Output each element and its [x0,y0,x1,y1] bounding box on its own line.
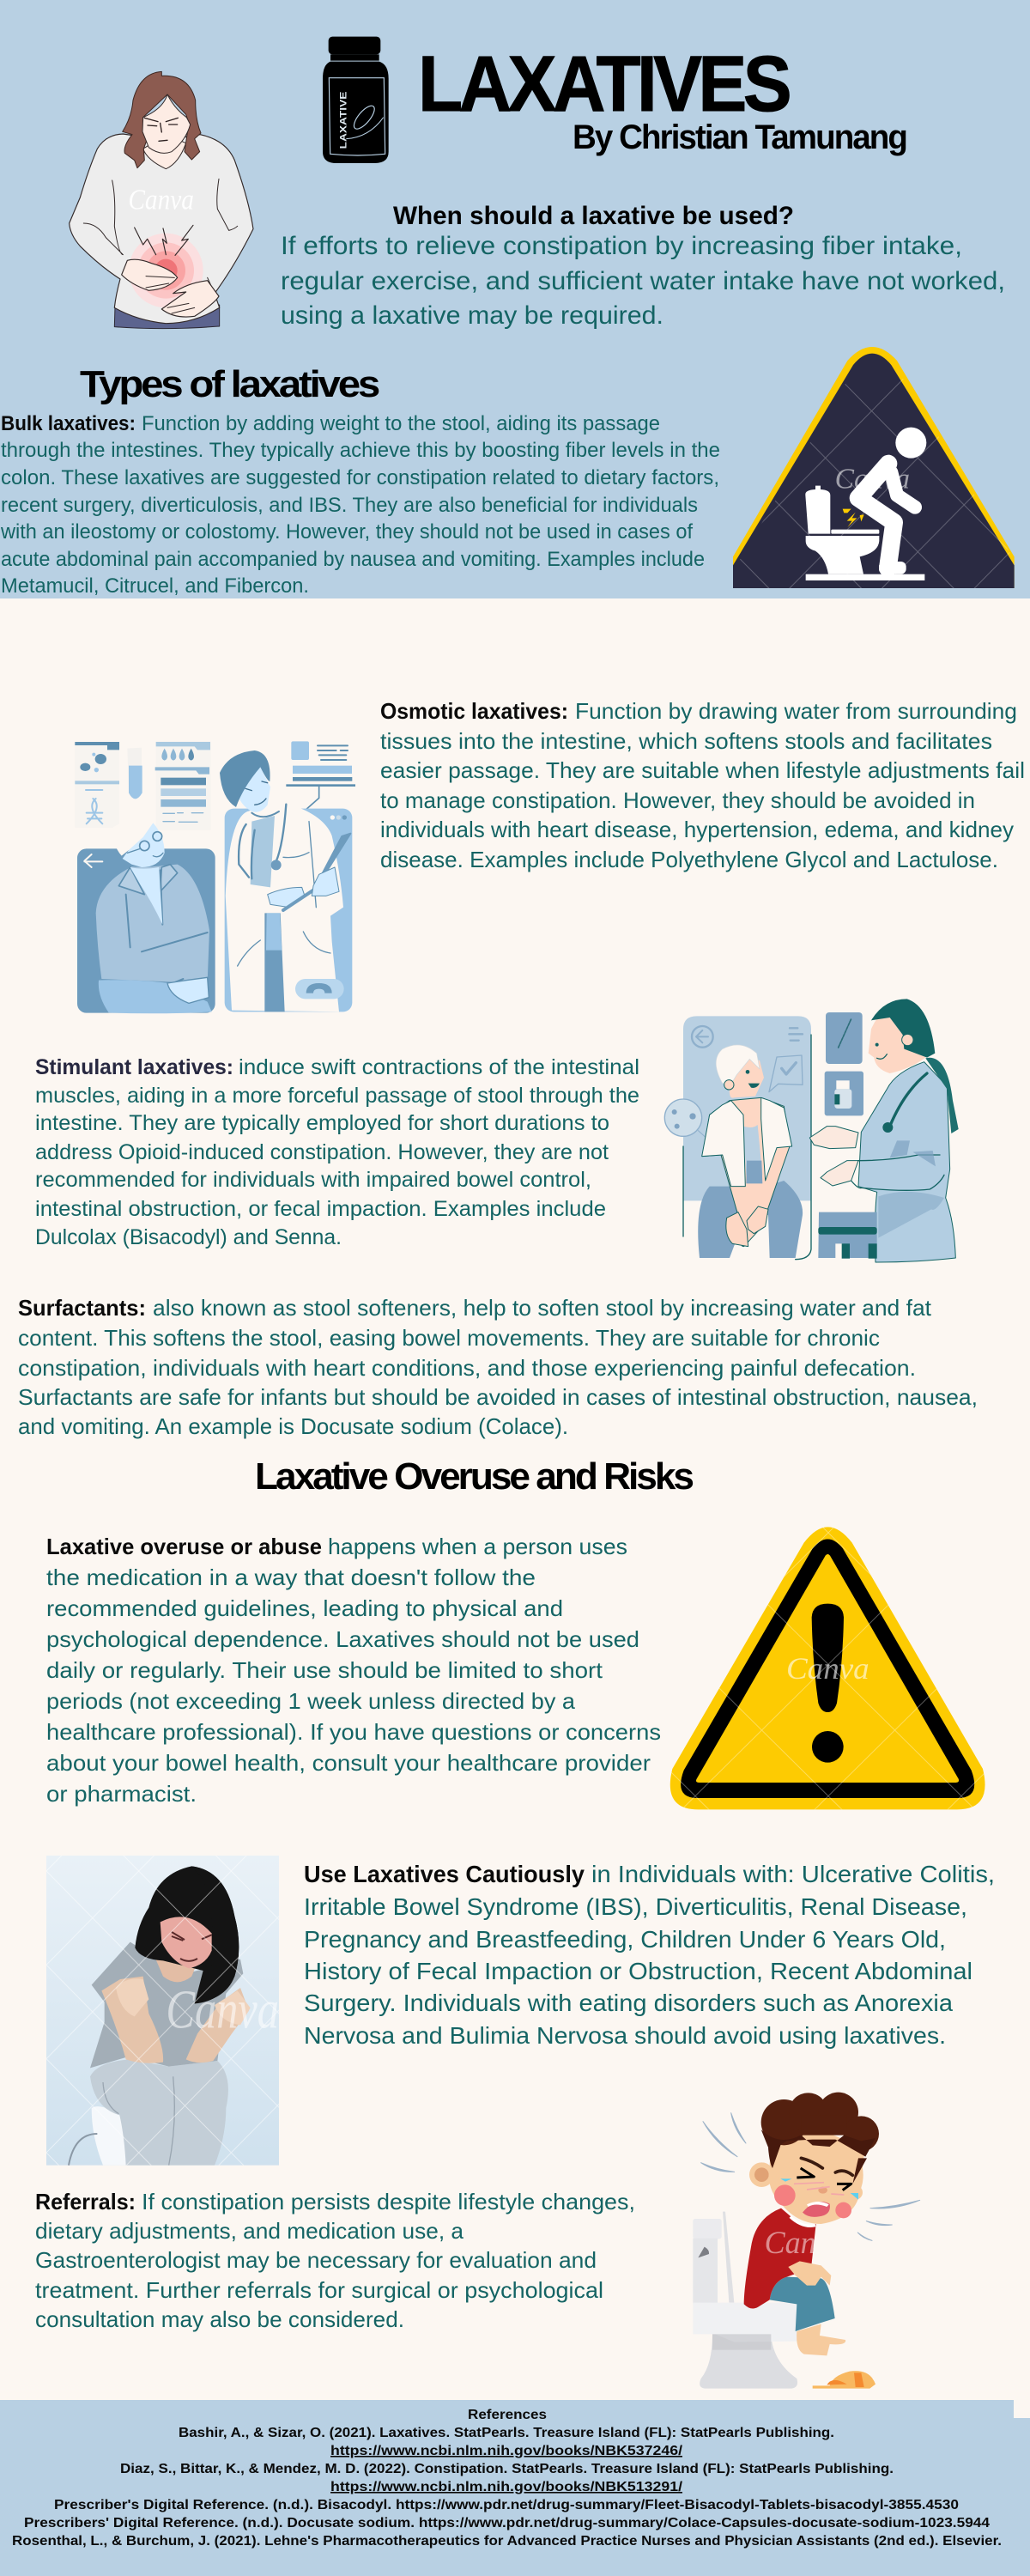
slipper [813,2371,876,2389]
text block: use cautiously: Irritable Bowel Syndrome (IBS), Diverticulitis, Renal Disease, [304,1893,967,1920]
text block: osmotic laxatives: to manage constipation. However, they should be avoided in [380,787,975,813]
text block: stimulant laxatives: muscles, aiding in a more forceful passage of stool through the [35,1084,639,1108]
text block: surfactants [18,1295,978,1439]
text block: overuse or abuse: happens when a person uses [328,1534,627,1559]
text block: osmotic laxatives: disease. Examples include Polyethylene Glycol and Lactulose. [380,847,998,872]
text block: references: Diaz, S., Bittar, K., & Mendez, M. D. (2022). Constipation. StatPearls. Treasure Island (FL): StatPearls Publishing. [120,2462,894,2476]
icon: crying boy on toilet [693,2093,920,2389]
text block: osmotic laxatives: individuals with heart disease, hypertension, edema, and kidney [380,817,1014,842]
text block: osmotic laxatives: Function by drawing water from surrounding [575,698,1017,724]
watermark: Canva [835,463,910,495]
text block: bulk laxatives: Metamucil, Citrucel, and Fibercon. [1,574,309,598]
text block: stimulant laxatives: recommended for individuals with impaired bowel control, [35,1168,591,1192]
left panel: patient [77,819,215,1013]
text block: use cautiously: Surgery. Individuals with eating disorders such as Anorexia [304,1990,953,2016]
text block: bulk laxatives: Function by adding weight to the stool, aiding its passage [142,412,660,435]
heading: when to use: When should a laxative be used? [393,202,794,230]
text block: references: Bashir, A., & Sizar, O. (2021). Laxatives. StatPearls. Treasure Island (FL): StatPearls Publishing. [179,2426,834,2440]
heading: types of laxatives: Types of laxatives [80,363,379,405]
text block: bulk laxatives: acute abdominal pain accompanied by nausea and vomiting. Examples include [1,548,705,571]
watermark: Canva [786,1651,869,1686]
motion lines [701,2113,920,2240]
photo: woman in pain on toilet [46,1856,279,2166]
text block: when to use: regular exercise, and sufficient water intake have not worked, [281,267,1005,295]
text block: bulk laxatives: through the intestines. They typically achieve this by boosting fiber levels in the [1,439,720,462]
bottle label: LAXATIVE [338,91,348,149]
text block: references: https://www.ncbi.nlm.nih.gov/books/NBK513291/ [330,2480,683,2494]
text block: stimulant laxatives: address Opioid-induced constipation. However, they are not [35,1140,609,1164]
text block: referrals: Gastroenterologist may be necessary for evaluation and [35,2247,597,2273]
hair [761,2093,879,2184]
text block: overuse or abuse: daily or regularly. Their use should be limited to short [46,1657,603,1683]
text block: use cautiously: History of Fecal Impaction or Obstruction, Recent Abdominal [304,1958,972,1984]
text block: osmotic laxatives [380,698,1025,872]
text block: use cautiously [304,1861,995,2049]
text block: referrals: dietary adjustments, and medication use, a [35,2218,464,2244]
text block: osmotic laxatives: Osmotic laxatives: [380,698,568,724]
text block: references: Prescriber's Digital Reference. (n.d.). Bisacodyl. https://www.pdr.net/drug-summary/Fleet-Bisacodyl-Tablets-bisacodyl-3855.4530 [54,2498,959,2512]
text block: overuse or abuse: the medication in a way that doesn't follow the [46,1564,536,1590]
text block: osmotic laxatives: easier passage. They are suitable when lifestyle adjustments fail [380,757,1025,783]
text block: stimulant laxatives: intestinal obstruction, or fecal impaction. Examples include [35,1197,606,1221]
text block: bulk laxatives: with an ileostomy or colostomy. However, they should not be used in cases of [0,520,693,544]
text block: referrals: If constipation persists despite lifestyle changes, [142,2189,635,2215]
text block: stimulant laxatives: Dulcolax (Bisacodyl) and Senna. [35,1225,342,1249]
icon: laxative bottle [323,37,389,163]
watermark: Canva [128,184,194,216]
text block: overuse or abuse: healthcare professional). If you have questions or concerns [46,1719,661,1745]
icon: woman with stomach ache [70,71,253,329]
text block: overuse or abuse: or pharmacist. [46,1781,197,1807]
panel: references band [0,2400,1030,2576]
text block: use cautiously: Use Laxatives Cautiously [304,1861,585,1887]
illustration: doctor with older patient [75,741,355,1013]
watermark: Canva [166,1980,279,2040]
text block: use cautiously: in Individuals with: Ulcerative Colitis, [591,1861,995,1887]
text block: overuse or abuse [46,1534,661,1807]
text block: overuse or abuse: recommended guidelines, leading to physical and [46,1595,563,1621]
toilet [693,2212,797,2389]
text block: surfactants: Surfactants: [18,1295,146,1321]
text block: stimulant laxatives: Stimulant laxatives: [35,1055,233,1079]
text block: referrals [35,2189,635,2332]
text block: when to use [281,232,1005,330]
text block: when to use: If efforts to relieve constipation by increasing fiber intake, [281,232,962,260]
text block: references: References [468,2408,547,2422]
text block: surfactants: content. This softens the stool, easing bowel movements. They are suitable for chronic [18,1325,880,1351]
heading: overuse and risks: Laxative Overuse and Risks [255,1455,694,1498]
chart papers [75,741,355,830]
right panel: doctor [220,750,352,1012]
nurse [809,999,959,1262]
text block: overuse or abuse: Laxative overuse or abuse [46,1534,322,1559]
text block: stimulant laxatives [35,1055,639,1249]
text block: surfactants: constipation, individuals with heart conditions, and those experiencing painful defecation. [18,1355,916,1381]
subtitle: author: By Christian Tamunang [573,118,906,156]
text block: bulk laxatives [0,412,720,598]
wall cards [825,1012,863,1115]
icon: warning triangle [670,1527,985,1810]
phone panel [664,1016,811,1260]
watermark: Can [765,2225,816,2260]
text block: surfactants: and vomiting. An example is Docusate sodium (Colace). [18,1413,568,1439]
text block: when to use: using a laxative may be required. [281,301,663,330]
text block: referrals: Referrals: [35,2189,136,2215]
panel: blue header band [0,0,1030,598]
title: LAXATIVES [418,40,790,128]
text block: use cautiously: Pregnancy and Breastfeeding, Children Under 6 Years Old, [304,1926,946,1953]
text block: references: Rosenthal, L., & Burchum, J. (2021). Lehne's Pharmacotherapeutics for Advanced Practice Nurses and Physician Assistants (2nd ed.). Elsevier. [12,2534,1002,2549]
boy [744,2129,864,2355]
text block: stimulant laxatives: intestine. They are typically employed for short durations to [35,1111,609,1135]
text block: bulk laxatives: colon. These laxatives are suggested for constipation related to dietary factors, [1,466,719,489]
text block: referrals: treatment. Further referrals for surgical or psychological [35,2277,603,2303]
text block: references: Prescribers' Digital Reference. (n.d.). Docusate sodium. https://www.pdr.net/drug-summary/Colace-Capsules-docusate-sodium-1023.5944 [24,2516,990,2530]
patient [698,1045,803,1258]
illustration: nurse talking with patient [664,999,959,1262]
text block: bulk laxatives: Bulk laxatives: [1,412,136,435]
text block: referrals: consultation may also be considered. [35,2306,404,2332]
text block: surfactants: also known as stool softeners, help to soften stool by increasing water and fat [153,1295,932,1321]
text block: stimulant laxatives: induce swift contractions of the intestinal [239,1055,639,1079]
text block: overuse or abuse: about your bowel health, consult your healthcare provider [46,1750,651,1776]
icon: straining on toilet warning triangle [733,343,1015,588]
text block: surfactants: Surfactants are safe for infants but should be avoided in cases of intestinal obstruction, nausea, [18,1384,978,1410]
text block: overuse or abuse: psychological dependence. Laxatives should not be used [46,1626,639,1652]
text block: overuse or abuse: periods (not exceeding 1 week unless directed by a [46,1688,576,1714]
text block: osmotic laxatives: tissues into the intestine, which softens stools and facilitates [380,728,992,754]
text block: references: https://www.ncbi.nlm.nih.gov/books/NBK537246/ [330,2444,683,2458]
text block: use cautiously: Nervosa and Bulimia Nervosa should avoid using laxatives. [304,2022,946,2049]
text block: references [12,2408,1002,2549]
text block: bulk laxatives: recent surgery, diverticulosis, and IBS. They are also beneficial for individuals [1,494,698,517]
